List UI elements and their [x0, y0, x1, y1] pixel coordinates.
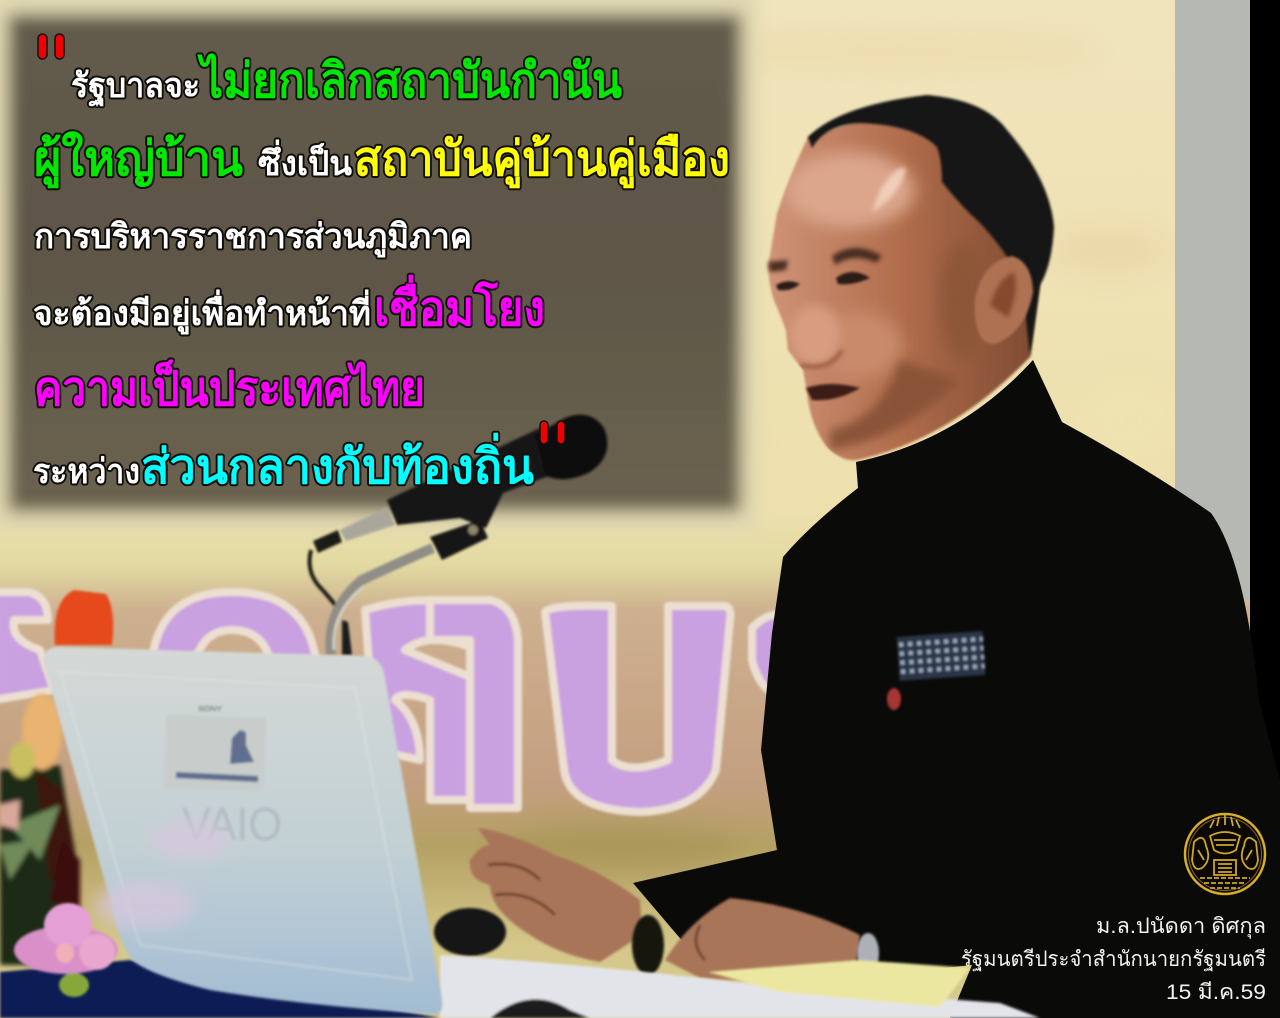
line 4 [33, 274, 545, 336]
line 1: ไม่ยกเลิกสถาบันกำนัน [196, 52, 622, 108]
text background panel [0, 0, 758, 533]
tulip flower [55, 590, 113, 645]
flower arrangement [0, 694, 80, 965]
line 4: เชื่อมโยง [374, 274, 545, 336]
line 2: ผู้ใหญ่บ้าน [34, 130, 243, 189]
laptop logo: VAIO [182, 798, 282, 850]
attribution text: 15 มี.ค.59 [1166, 981, 1266, 1004]
line 1 [71, 52, 622, 108]
forehead glow [785, 152, 915, 228]
line 6 [33, 432, 534, 494]
attribution text [961, 915, 1266, 1004]
portrait: speaker in black jacket [470, 95, 1280, 1018]
line 1: รัฐบาลจะ [71, 67, 200, 108]
ear [975, 256, 1033, 344]
mouth [806, 384, 860, 400]
jacket [633, 360, 1280, 1018]
side of face shadow [937, 247, 972, 353]
line 2 [34, 130, 730, 189]
line 6: ระหว่าง [33, 453, 140, 491]
hair [808, 95, 1054, 357]
quote text block [33, 34, 730, 494]
line 2: สถาบันคู่บ้านคู่เมือง [354, 133, 730, 189]
line 4: จะต้องมีอยู่เพื่อทำหน้าที่ [33, 289, 371, 335]
laptop sticker [164, 706, 266, 792]
line 6: ส่วนกลางกับท้องถิ่น [141, 432, 534, 494]
right hand [665, 898, 860, 980]
background grey pillar and dark edge [1175, 0, 1280, 1018]
attribution text: รัฐมนตรีประจำสำนักนายกรัฐมนตรี [961, 948, 1266, 971]
microphone on gooseneck stand [310, 415, 607, 655]
watch [632, 915, 879, 975]
opening quotation mark [38, 34, 64, 59]
icon: government seal [1185, 814, 1265, 894]
brows and eyes [768, 248, 882, 272]
laptop sticker: SONY [198, 706, 222, 713]
line 2: ซึ่งเป็น [258, 139, 352, 183]
neck and face [768, 120, 1040, 460]
line 5: ความเป็นประเทศไทย [34, 359, 425, 416]
pink flowers [14, 903, 118, 997]
attribution text: ม.ล.ปนัดดา ดิศกุล [1096, 915, 1266, 939]
lapel pin [887, 688, 901, 710]
laptop lid [43, 647, 442, 1014]
laptop reflection [95, 820, 230, 929]
left hand [470, 828, 642, 962]
table and papers [0, 955, 1040, 1018]
cheek glow [836, 310, 906, 380]
background purple banner lettering [0, 592, 790, 812]
line 3: การบริหารราชการส่วนภูมิภาค [34, 218, 472, 258]
lower face shadow [830, 360, 960, 450]
closing quotation mark [540, 421, 565, 444]
dark object behind laptop [434, 908, 506, 956]
nose [790, 305, 840, 365]
pocket square [897, 631, 985, 681]
